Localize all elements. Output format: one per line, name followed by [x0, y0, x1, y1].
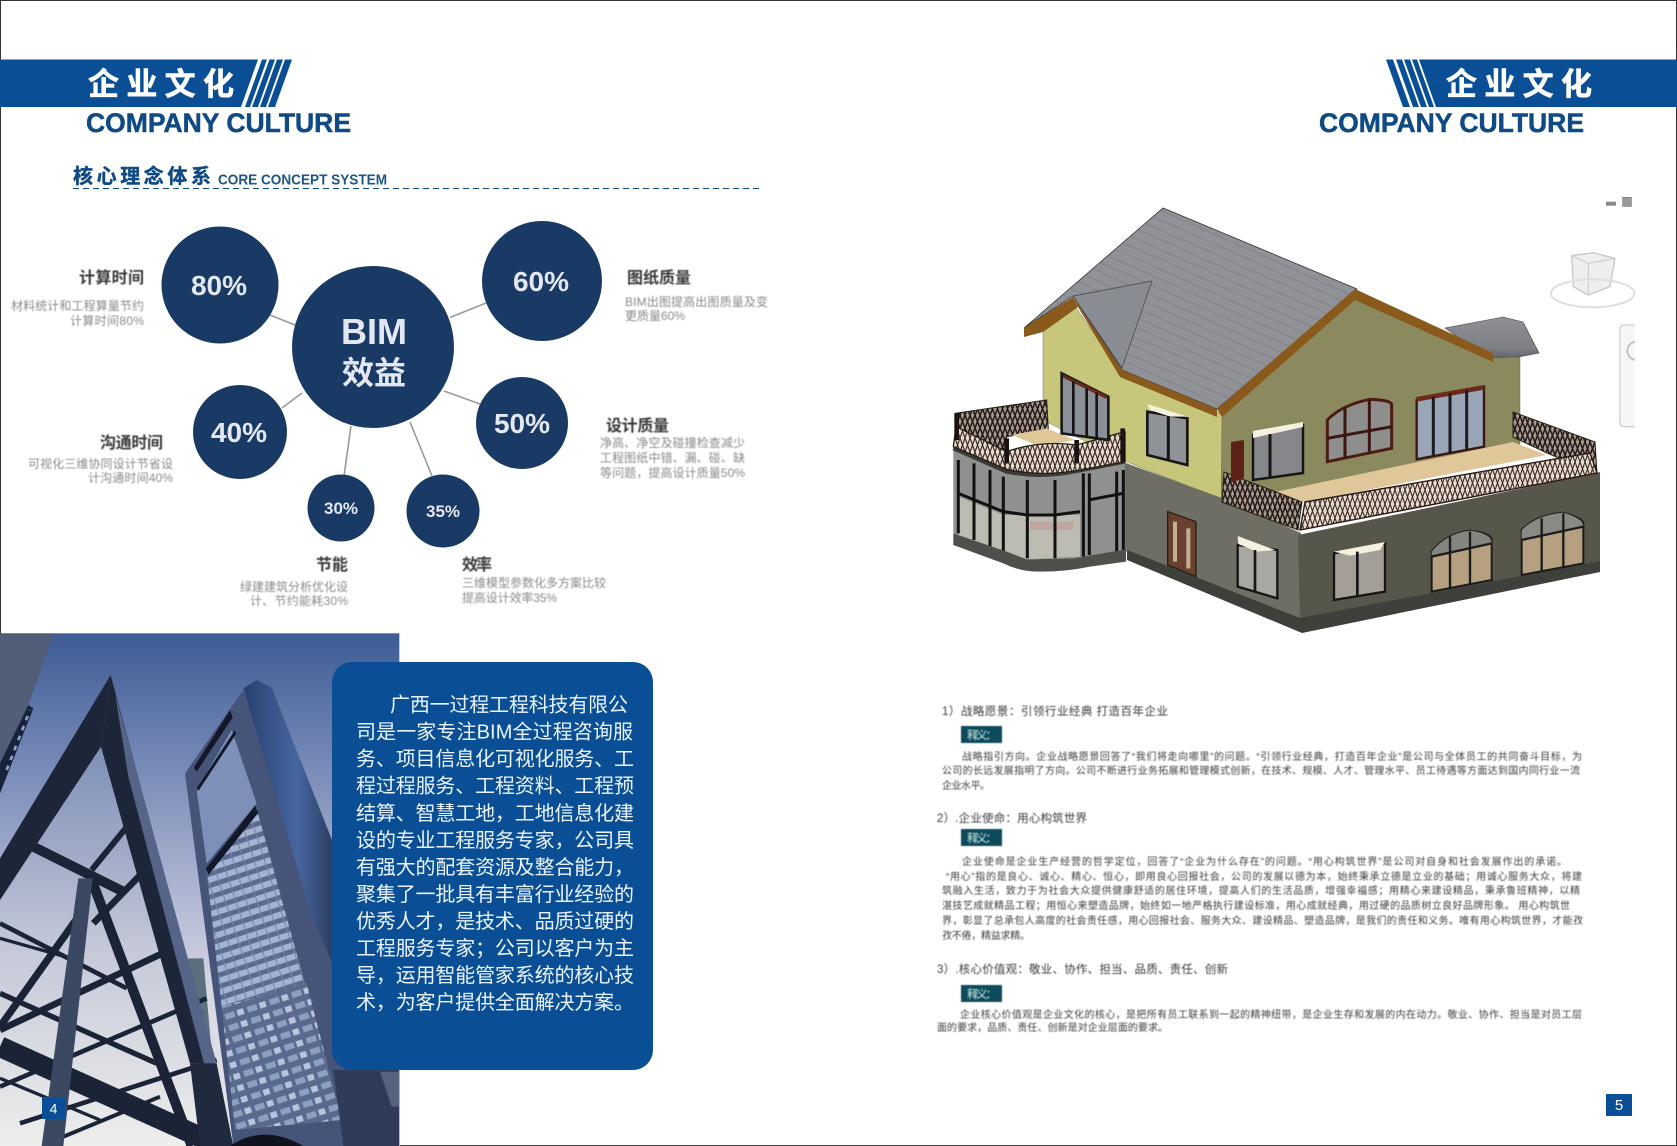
badge: interpretation 3: 释义： [967, 988, 997, 1001]
header stripes left [245, 60, 292, 107]
tower front panel top [197, 730, 257, 863]
section heading: core concept system [73, 164, 760, 188]
label: design quality [600, 416, 745, 480]
company intro text: 设的专业工程服务专家，公司具 [356, 829, 634, 852]
left tower [0, 633, 53, 793]
node 35% [406, 474, 480, 548]
company intro text: 司是一家专注BIM全过程咨询服 [356, 721, 633, 744]
label: drawing quality: 更质量60% [625, 309, 685, 323]
label: energy saving: 计、节约能耗30% [250, 593, 348, 608]
header subtitle left: COMPANY CULTURE [86, 108, 351, 138]
mission body: 孜不倦，精益求精。 [942, 929, 1030, 942]
label: energy saving: 节能 [316, 555, 348, 574]
vision body: 公司的长远发展指明了方向。公司不断进行业务拓展和管理模式创新，在技术、规模、人才、管理水平、员工待遇等方面达到国内同行业一流 [942, 764, 1580, 777]
hub and spoke diagram: BIM benefits [162, 221, 602, 548]
mission body: 筑融入生活，致力于为社会大众提供健康舒适的居住环境，提高人们的生活品质，增强幸福感；用精心来建设精品，秉承鲁班精神，以精 [942, 884, 1580, 897]
label: calculation time: 计算时间 [79, 268, 144, 287]
company intro text: 程过程服务、工程资料、工程预 [356, 775, 634, 798]
hub: BIM 效益: 效益 [342, 355, 406, 391]
label: drawing quality [625, 268, 768, 323]
main roof [1024, 208, 1357, 409]
node 40%: 40% [211, 417, 267, 448]
connector lines [270, 303, 486, 476]
label: calculation time [11, 268, 144, 328]
company intro text: 工程服务专家；公司以客户为主 [356, 937, 634, 960]
label: communication time [28, 433, 173, 485]
tower curved glass side [243, 680, 333, 967]
company intro text: 优秀人才，是技术、品质过硬的 [356, 910, 634, 933]
label: design quality: 净高、净空及碰撞检查减少 [600, 435, 745, 450]
label: energy saving: 绿建建筑分析优化设 [240, 579, 348, 594]
badge: interpretation 1: 释义： [967, 729, 997, 742]
hub: BIM 效益: BIM [341, 311, 407, 352]
badge: interpretation 2: 释义： [967, 832, 997, 845]
tower dark slits [194, 710, 258, 875]
base plinth [1127, 550, 1600, 633]
tower body [185, 690, 399, 1146]
vision heading: 1）战略愿景：引领行业经典 打造百年企业 [942, 704, 1168, 718]
rear railing [1513, 412, 1597, 474]
hub: BIM 效益 [292, 266, 454, 428]
header title right: 企业文化 [1446, 67, 1592, 102]
badge: interpretation 3 [961, 985, 1002, 1002]
node 35%: 35% [426, 502, 460, 521]
label: communication time: 可视化三维协同设计节省设 [28, 456, 173, 471]
background building [133, 958, 220, 1146]
label: calculation time: 计算时间80% [70, 313, 144, 328]
page number 4 [42, 1097, 65, 1119]
terrace floor [1275, 442, 1547, 502]
section heading: core concept system: CORE CONCEPT SYSTEM [218, 172, 387, 188]
glass roof panes [0, 747, 220, 1146]
mission heading: 2）.企业使命：用心构筑世界 [937, 811, 1088, 825]
company intro text: 术，为客户提供全面解决方案。 [356, 991, 634, 1014]
page number 4: 4 [50, 1100, 58, 1116]
company intro text: 结算、智慧工地，工地信息化建 [356, 802, 634, 825]
red door upper [1231, 440, 1244, 483]
label: design quality: 等问题，提高设计质量50% [600, 465, 745, 480]
front railing [1300, 453, 1597, 530]
vision body [942, 750, 1582, 792]
lower bay window left [1238, 536, 1277, 598]
label: drawing quality: BIM出图提高出图质量及变 [625, 294, 768, 309]
mission body: 界，彰显了总承包人高度的社会责任感，用心回报社会、服务大众、建设精品、塑造品牌，是我们的责任和义务。唯有用心构筑世界，才能孜 [942, 914, 1583, 927]
arched window [1327, 399, 1392, 462]
A-frame left arm [0, 675, 111, 900]
A-frame right arm [101, 675, 233, 1146]
node 60% [482, 221, 602, 341]
bay window upper left [1147, 404, 1187, 465]
mission body: “用心”指的是良心、诚心、精心、恒心，即用良心回报社会，公司的发展以德为本，始终秉承立德是立业的基础；用诚心服务大众，将建 [946, 870, 1582, 883]
label: communication time: 沟通时间 [100, 433, 163, 452]
back roof [1445, 317, 1539, 362]
company intro text: 导，运用智能管家系统的核心技 [356, 964, 634, 987]
section heading: core concept system: 核心理念体系 [73, 164, 211, 188]
header band left [0, 60, 258, 107]
node 60%: 60% [513, 266, 569, 297]
lower right dark wall [230, 1070, 399, 1146]
upper left wall [1043, 303, 1224, 500]
lower left wall [1123, 462, 1302, 620]
label: efficiency: 三维模型参数化多方案比较 [462, 575, 606, 590]
header band right [1419, 60, 1677, 107]
upper right wall [1221, 296, 1520, 510]
lower bay window right [1334, 542, 1385, 600]
bay window upper center [1253, 422, 1303, 480]
header title left: 企业文化 [88, 67, 234, 102]
left balcony [953, 400, 1125, 473]
label: efficiency [462, 555, 606, 605]
values body: 面的要求，品质、责任、创新是对企业层面的要求。 [937, 1021, 1168, 1034]
lower red door [1168, 512, 1196, 577]
label: efficiency: 提高设计效率35% [462, 590, 557, 605]
label: communication time: 计沟通时间40% [88, 471, 173, 485]
label: drawing quality: 图纸质量 [627, 268, 691, 287]
node 80%: 80% [191, 270, 247, 301]
label: design quality: 工程图纸中错、漏、碰、缺 [600, 450, 745, 465]
navigation bar [1620, 325, 1635, 427]
side railing [1222, 472, 1302, 530]
glazed door right [1417, 387, 1484, 459]
badge: interpretation 1 [961, 726, 1002, 743]
vision body: 企业水平。 [942, 779, 990, 792]
node 50% [476, 377, 568, 469]
tower lower windows [222, 983, 342, 1130]
header stripes right [1386, 60, 1434, 107]
vision body: 战略指引方向。企业战略愿景回答了“我们将走向哪里”的问题。“引领行业经典，打造百年企业”是公司与全体员工的共同奋斗目标，为 [962, 750, 1582, 763]
mission body: 企业使命是企业生产经营的哲学定位，回答了“企业为什么存在”的问题。“用心构筑世界”是公司对自身和社会发展作出的承诺。 [962, 855, 1567, 868]
right page header [1319, 60, 1677, 138]
lower arched window 1 [1432, 531, 1492, 592]
upper door window [1062, 373, 1108, 440]
vertical pillar [42, 878, 93, 1146]
company intro text: 聚集了一批具有丰富行业经验的 [356, 883, 634, 906]
label: energy saving [240, 555, 348, 608]
label: design quality: 设计质量 [606, 416, 669, 435]
conservatory [953, 447, 1126, 572]
window control icons [1606, 197, 1631, 206]
3D BIM house model [953, 197, 1635, 633]
mission body: 湛技艺成就精品工程；用恒心来塑造品牌，始终如一地严格执行建设标准，用心成就经典，用过硬的品质树立良好品牌形象。 用心构筑世 [942, 899, 1570, 912]
lower arched window 2 [1522, 513, 1583, 575]
node 50%: 50% [494, 408, 550, 439]
roof struts [0, 825, 217, 1146]
company intro text: 有强大的配套资源及整合能力， [356, 856, 634, 879]
brown eaves [1024, 289, 1493, 417]
badge: interpretation 2 [961, 829, 1002, 846]
left page header [0, 60, 351, 138]
company intro text: 务、项目信息化可视化服务、工 [356, 748, 634, 771]
node 80% [162, 226, 278, 344]
tower window rows [207, 808, 307, 1007]
company intro text: 广西一过程工程科技有限公 [390, 694, 628, 716]
lower right wall [1298, 472, 1600, 620]
label: calculation time: 材料统计和工程算量节约 [11, 298, 144, 313]
values body: 企业核心价值观是企业文化的核心，是把所有员工联系到一起的精神纽带，是企业生存和发展的内在动力。敬业、协作、担当是对员工层 [960, 1008, 1582, 1021]
view cube [1551, 253, 1634, 307]
photo: glass skyscrapers [0, 633, 399, 1146]
label: efficiency: 效率 [462, 555, 492, 574]
values heading: 3）.核心价值观：敬业、协作、担当、品质、责任、创新 [937, 962, 1228, 976]
values body [937, 1008, 1582, 1034]
header subtitle right: COMPANY CULTURE [1319, 108, 1584, 138]
dormer roof [1073, 281, 1152, 368]
page number 5 [1606, 1094, 1632, 1116]
mission body [942, 855, 1583, 942]
node 40% [193, 385, 287, 479]
company intro panel [332, 662, 653, 1070]
company intro text [356, 694, 634, 1014]
node 30% [308, 474, 374, 542]
culture text column [937, 704, 1583, 1034]
node 30%: 30% [324, 499, 358, 518]
page number 5: 5 [1615, 1097, 1623, 1114]
